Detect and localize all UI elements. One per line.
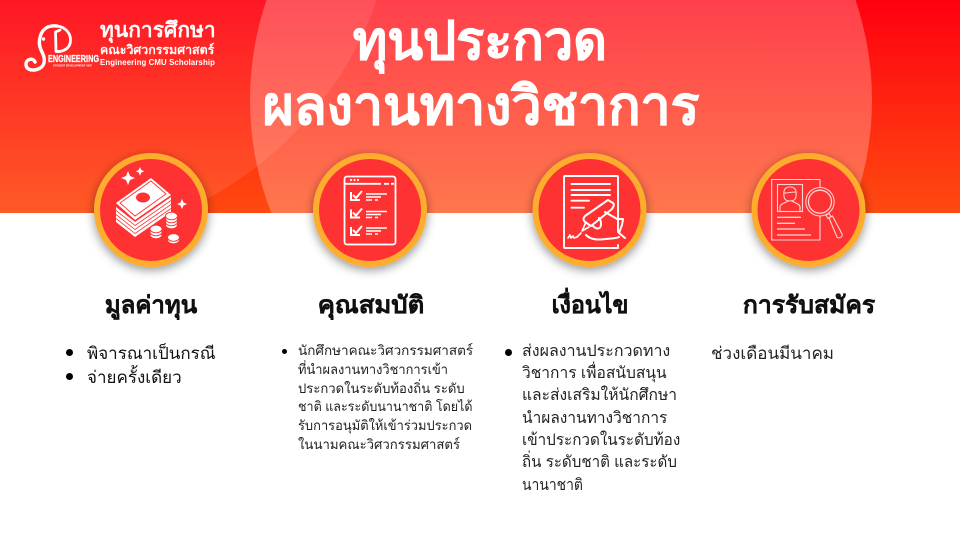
text: qualifications list	[282, 343, 473, 452]
text: value list: จ่ายครั้งเดียว	[87, 368, 182, 387]
text: qualifications list: ชาติ และระดับนานาชาติ โดยได้	[298, 399, 473, 414]
text: qualifications list: รับการอนุมัติให้เข้าร่วมประกวด	[298, 418, 472, 432]
header background	[0, 0, 960, 213]
heading: qualifications: คุณสมบัติ	[317, 292, 424, 319]
text: value list	[66, 343, 216, 387]
icon: resume search	[745, 150, 872, 276]
text: value list: พิจารณาเป็นกรณี	[87, 344, 216, 363]
heading: value: มูลค่าทุน	[105, 292, 197, 319]
icon: money	[88, 150, 214, 276]
text: conditions list: เข้าประกวดในระดับท้อง	[522, 432, 680, 449]
logo	[24, 24, 99, 72]
logo subheading: คณะวิศวกรรมศาสตร์	[100, 43, 214, 57]
text: conditions list: วิชาการ เพื่อสนับสนุน	[522, 365, 667, 382]
text: application period: ช่วงเดือนมีนาคม	[711, 344, 834, 363]
heading: conditions: เงื่อนไข	[551, 292, 628, 319]
text: conditions list	[505, 343, 680, 494]
logo: STUDENT DEVELOPMENT UNIT	[53, 64, 92, 68]
title line 2: ผลงานทางวิชาการ	[263, 77, 699, 136]
text: qualifications list: ในนามคณะวิศวกรรมศาสตร์	[298, 436, 460, 452]
text: conditions list: ส่งผลงานประกวดทาง	[522, 343, 670, 360]
title: ทุนประกวด	[353, 12, 607, 71]
text: conditions list: นานาชาติ	[522, 476, 583, 494]
text: conditions list: นำผลงานทางวิชาการ	[522, 410, 667, 426]
icon: checklist	[306, 150, 434, 276]
logo heading: ทุนการศึกษา	[100, 19, 216, 42]
text: conditions list: และส่งเสริมให้นักศึกษา	[522, 387, 677, 404]
logo caption: Engineering CMU Scholarship	[100, 58, 215, 67]
text: qualifications list: ประกวดในระดับท้องถิ่น ระดับ	[298, 380, 465, 396]
text: qualifications list: นักศึกษาคณะวิศวกรรมศาสตร์	[298, 343, 473, 358]
text: qualifications list: ที่นำผลงานทางวิชาการเข้า	[298, 362, 448, 377]
icon: signing document	[526, 150, 653, 276]
heading: application: การรับสมัคร	[742, 292, 875, 319]
text: conditions list: ถิ่น ระดับชาติ และระดับ	[522, 454, 677, 471]
